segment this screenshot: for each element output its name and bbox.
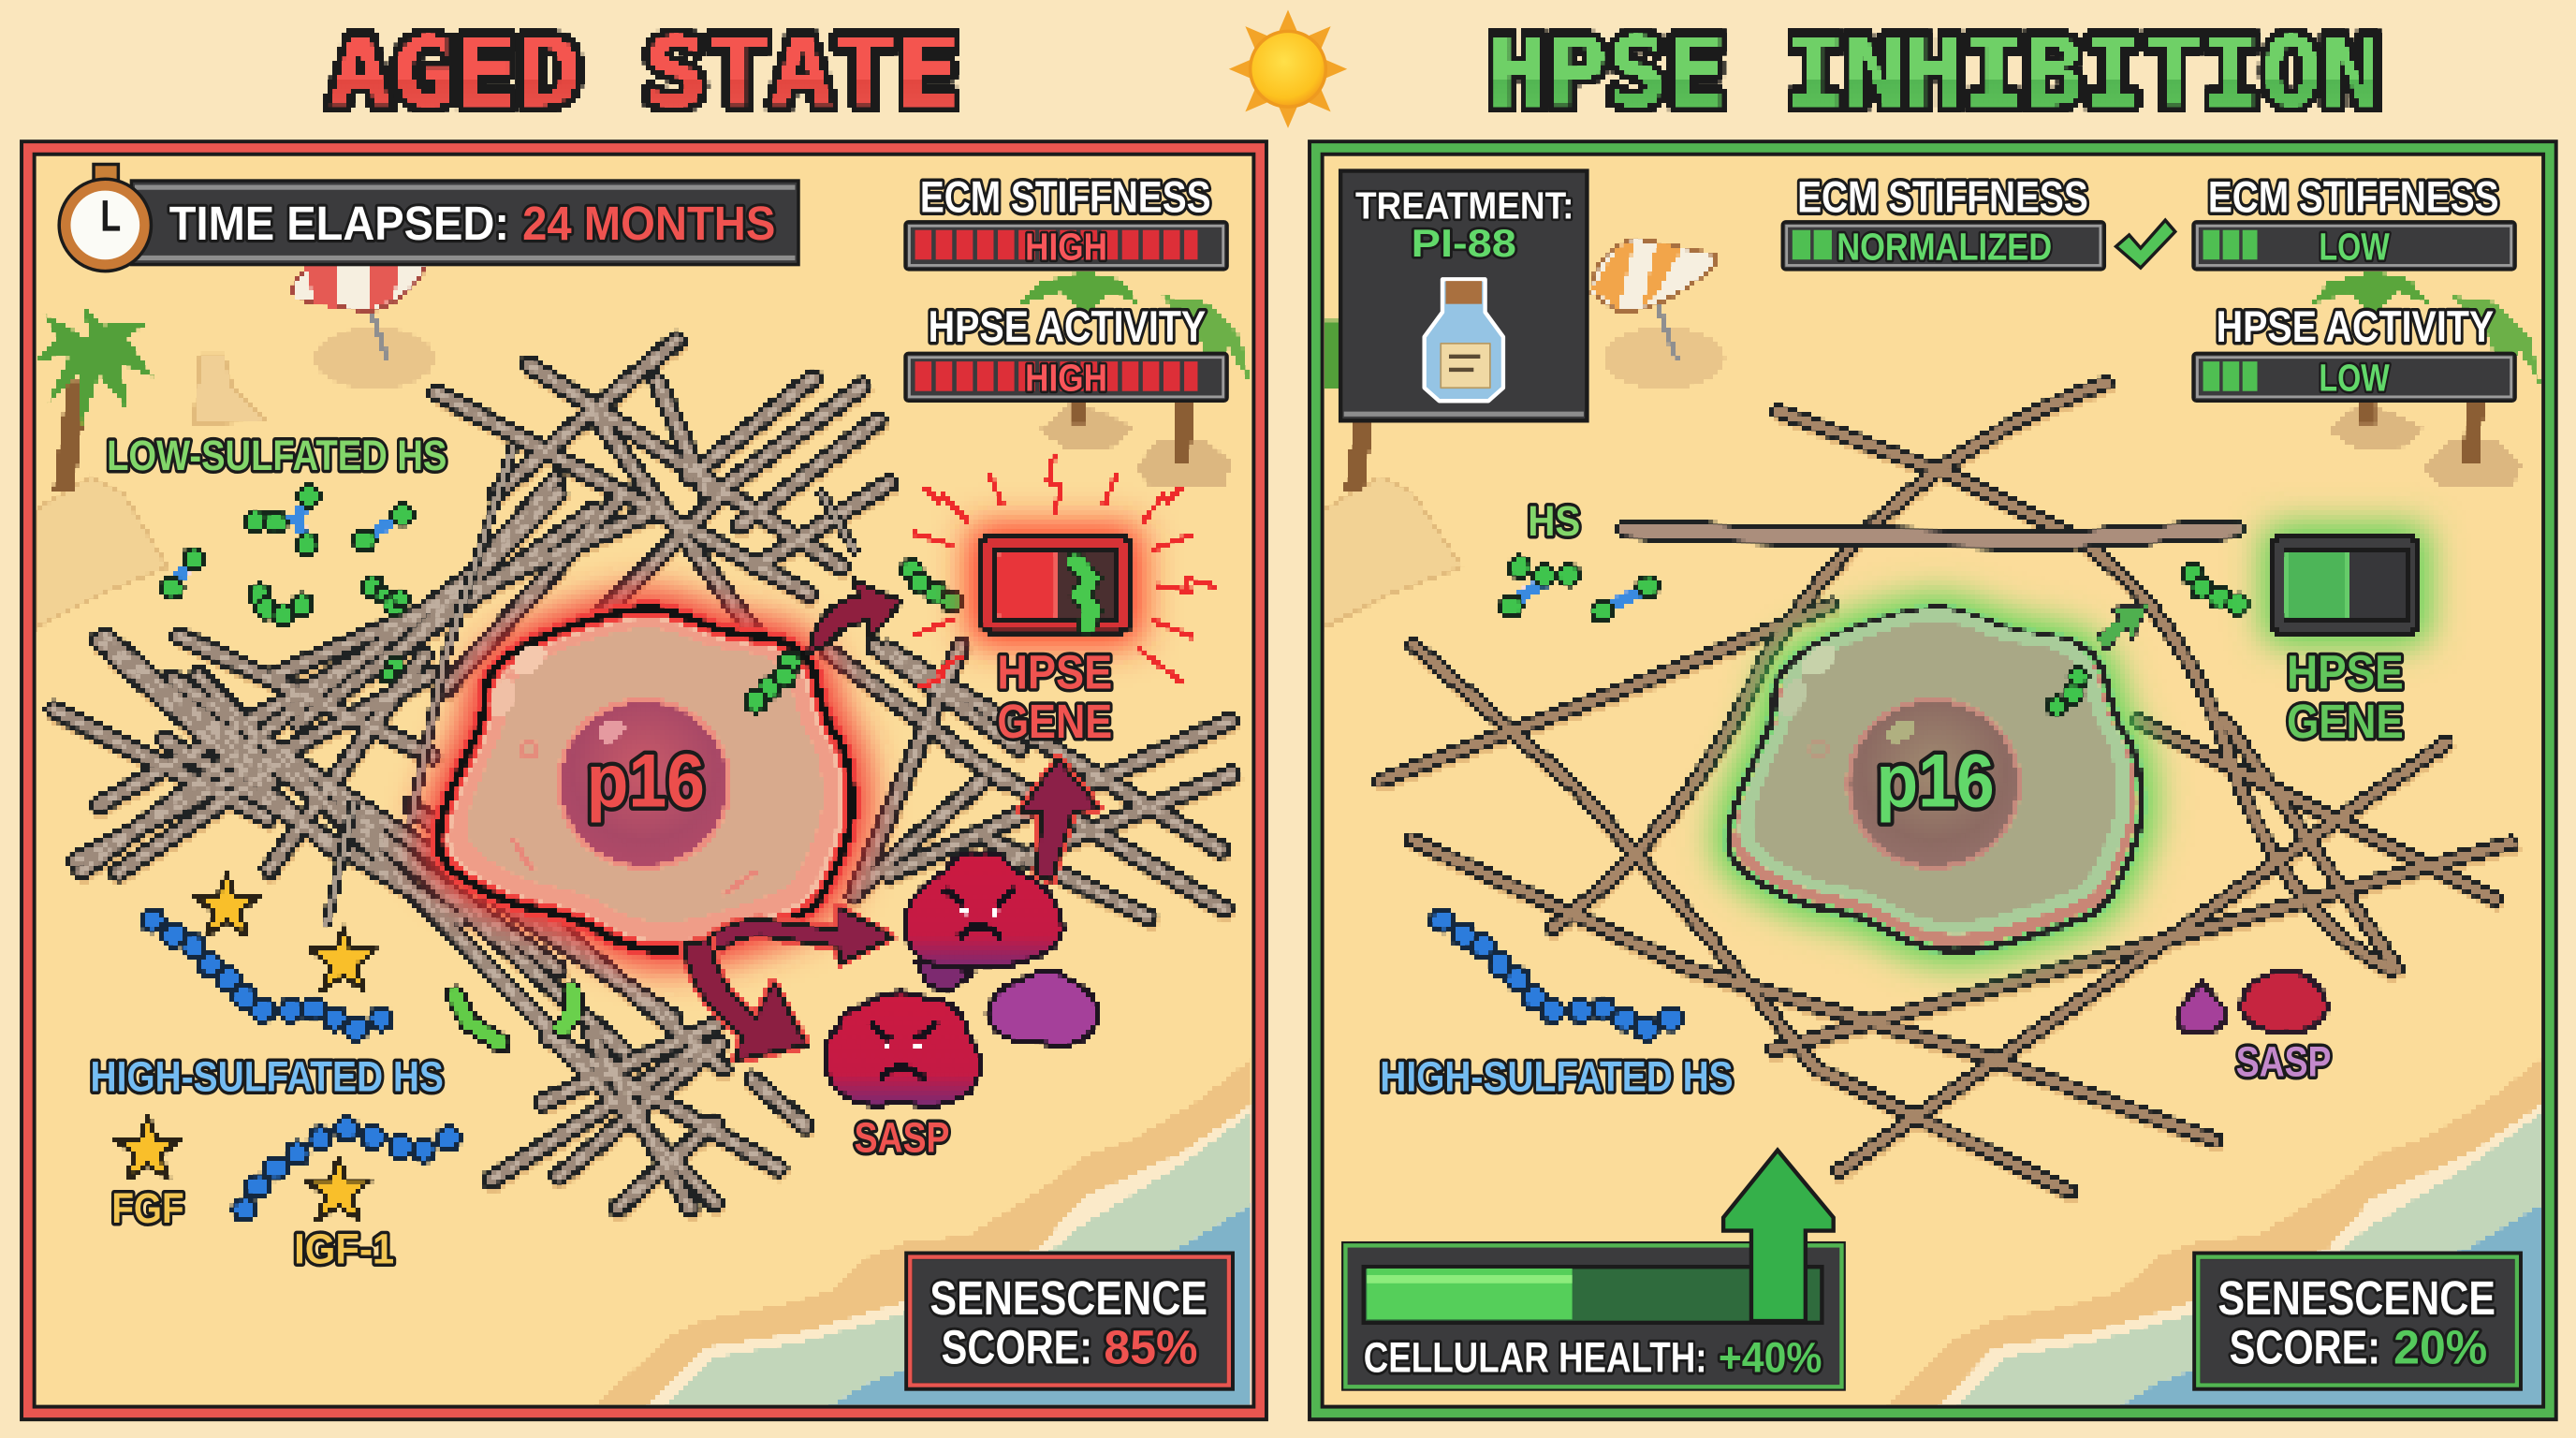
umbrella shadow bbox=[1603, 327, 1725, 389]
palm tree left bbox=[37, 302, 154, 493]
label: fgf: FGF bbox=[111, 1184, 184, 1232]
meter: hpse activity high: HIGH bbox=[1025, 357, 1107, 400]
meter: ecm stiffness low: LOW bbox=[2319, 225, 2391, 268]
arrow: small green bbox=[2097, 605, 2149, 651]
background palms bbox=[1018, 271, 1251, 487]
low-sulfated hs molecules bbox=[162, 486, 962, 712]
title: hpse inhibition: HPSE INHIBITION bbox=[1488, 18, 2380, 128]
meter: ecm stiffness normalized bbox=[1782, 172, 2104, 270]
hpse gene switch: on bbox=[912, 452, 1216, 688]
treatment card: TREATMENT: bbox=[1355, 183, 1573, 227]
ecm stick network: sparse bbox=[1380, 383, 2513, 1196]
growth factor stars bbox=[115, 873, 376, 1221]
arrow: cell to gene bbox=[809, 580, 902, 654]
label: p16: p16 bbox=[1876, 740, 1995, 824]
time elapsed bar: 24 MONTHS bbox=[522, 197, 775, 250]
arrow: health up bbox=[1723, 1151, 1834, 1321]
sandcastle bbox=[194, 355, 266, 424]
meter: ecm stiffness low: ECM STIFFNESS bbox=[2208, 172, 2499, 222]
label: igf-1: IGF-1 bbox=[294, 1225, 394, 1273]
senescence score 20% bbox=[2197, 1255, 2519, 1387]
title: aged state: AGED STATE bbox=[329, 18, 959, 128]
senescence score 85%: SENESCENCE bbox=[929, 1271, 1208, 1325]
beach water corner bbox=[1884, 1058, 2541, 1406]
arrow: secretion up bbox=[1020, 759, 1099, 881]
senescence score 85%: SCORE: bbox=[942, 1321, 1092, 1374]
label: hpse gene: GENE bbox=[2287, 695, 2404, 748]
label: p16: p16 bbox=[587, 740, 705, 824]
meter: hpse activity low: LOW bbox=[2319, 357, 2391, 400]
hs molecules bbox=[1500, 556, 2248, 716]
icon: bottle bbox=[1425, 279, 1503, 401]
label: hpse gene: HPSE bbox=[2287, 645, 2404, 698]
senescence score 85% bbox=[909, 1255, 1231, 1387]
cell: recovering bbox=[1728, 609, 2142, 951]
nucleus bbox=[559, 700, 729, 868]
arrow: secretion down bbox=[683, 940, 807, 1060]
time elapsed bar: TIME ELAPSED: bbox=[169, 197, 509, 250]
meter: ecm stiffness normalized: ECM STIFFNESS bbox=[1797, 172, 2088, 222]
palm tree left bbox=[1325, 320, 1373, 493]
panel border green bbox=[1316, 148, 2550, 1413]
label: low-sulfated hs: LOW-SULFATED HS bbox=[107, 432, 446, 479]
time elapsed bar bbox=[59, 165, 798, 271]
ecm stick network bbox=[54, 340, 1234, 1212]
icon: check mark bbox=[2116, 220, 2175, 268]
high-sulfated hs chains bbox=[141, 909, 460, 1221]
cellular health meter bbox=[1344, 1244, 1843, 1388]
sasp clouds bbox=[825, 852, 1098, 1106]
high-sulfated hs chain bbox=[1431, 909, 1682, 1040]
pixel art scene: treated beach bbox=[1314, 144, 2550, 1418]
label: hs: HS bbox=[1528, 497, 1580, 545]
treatment card: PI-88 bbox=[1412, 221, 1516, 265]
background palms bbox=[2308, 271, 2541, 487]
hpse gene switch: off bbox=[2264, 526, 2428, 644]
umbrella shadow bbox=[314, 327, 435, 389]
cellular health meter: CELLULAR HEALTH: bbox=[1364, 1334, 1707, 1382]
meter: ecm stiffness low bbox=[2193, 172, 2515, 270]
senescence score 85%: 85% bbox=[1104, 1321, 1197, 1374]
sand dune bbox=[37, 477, 168, 627]
label: sasp: SASP bbox=[855, 1113, 949, 1161]
meter: hpse activity high bbox=[905, 302, 1227, 401]
label: hpse gene: GENE bbox=[997, 695, 1112, 748]
cell: senescent bbox=[439, 609, 852, 951]
senescence score 20%: SENESCENCE bbox=[2217, 1271, 2496, 1325]
beach water corner bbox=[594, 1058, 1251, 1406]
meter: hpse activity low: HPSE ACTIVITY bbox=[2217, 302, 2494, 352]
meter: ecm stiffness high: HIGH bbox=[1025, 225, 1107, 268]
icon: stopwatch bbox=[59, 165, 151, 271]
panel: aged state bbox=[23, 144, 1260, 1418]
cut hs fragments bbox=[455, 990, 575, 1043]
senescence score 20%: 20% bbox=[2393, 1321, 2487, 1374]
meter: ecm stiffness normalized: NORMALIZED bbox=[1837, 225, 2052, 268]
cellular health meter: +40% bbox=[1719, 1334, 1822, 1382]
meter: hpse activity high: HPSE ACTIVITY bbox=[929, 302, 1206, 352]
panel: hpse inhibition bbox=[1314, 144, 2550, 1418]
label: sasp: SASP bbox=[2236, 1038, 2331, 1086]
senescence score 20%: SCORE: bbox=[2230, 1321, 2380, 1374]
label: high-sulfated hs: HIGH-SULFATED HS bbox=[91, 1052, 444, 1100]
beach umbrella bbox=[292, 259, 427, 361]
meter: hpse activity low bbox=[2193, 302, 2515, 401]
label: hpse gene bbox=[2287, 645, 2404, 748]
pixel art scene: aged beach bbox=[23, 144, 1258, 1418]
panel border red bbox=[28, 148, 1260, 1413]
beach umbrella bbox=[1590, 238, 1716, 361]
meter: ecm stiffness high bbox=[905, 172, 1227, 270]
sasp clouds: reduced bbox=[2176, 971, 2327, 1033]
label: hpse gene: HPSE bbox=[997, 645, 1112, 698]
arrow: secretion right bbox=[707, 907, 892, 962]
meter: ecm stiffness high: ECM STIFFNESS bbox=[920, 172, 1211, 222]
nucleus bbox=[1848, 700, 2019, 868]
alert rays bbox=[912, 452, 1216, 688]
treatment card bbox=[1340, 171, 1587, 420]
label: high-sulfated hs: HIGH-SULFATED HS bbox=[1380, 1052, 1734, 1100]
icon: sun bbox=[1229, 10, 1347, 128]
sand dune bbox=[1325, 477, 1462, 627]
label: hpse gene bbox=[997, 645, 1112, 748]
